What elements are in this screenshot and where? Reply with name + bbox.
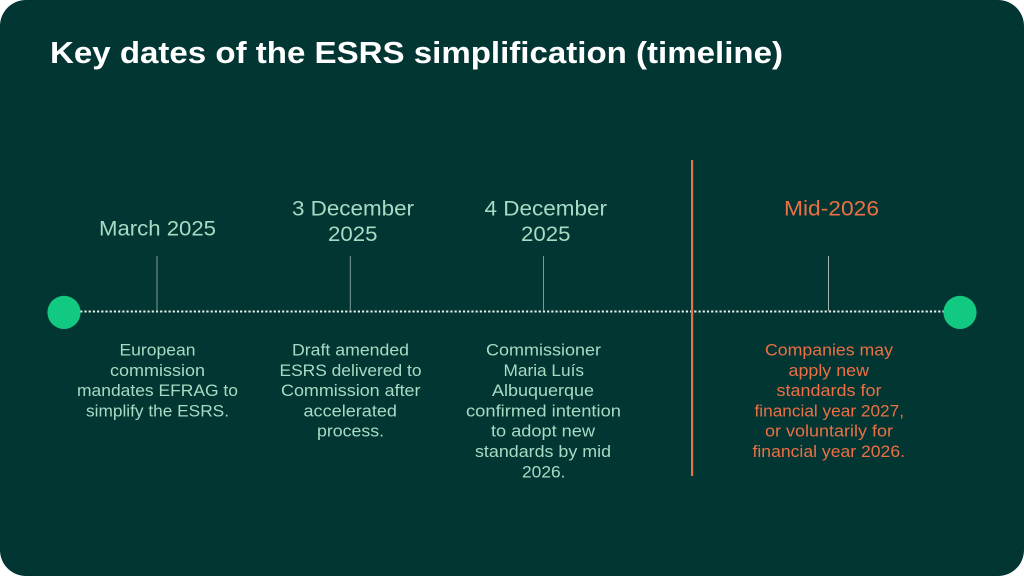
date heading: 2025 [328,223,378,246]
description: ESRS delivered to [280,362,422,380]
description: Maria Luís [504,362,584,380]
description: mandates EFRAG to [77,382,238,400]
milestone: 3 December 2025 [280,198,422,441]
description: 2026. [522,463,566,481]
description [280,342,422,441]
description: apply new [788,362,869,380]
description: simplify the ESRS. [86,402,229,420]
date heading: 2025 [521,223,570,246]
connector stem [156,256,158,311]
date heading [484,198,607,246]
description: to adopt new [491,423,595,441]
description [466,342,621,481]
date heading: 4 December [484,198,607,220]
description: standards by mid [475,443,611,461]
description: or voluntarily for [765,423,894,441]
description: accelerated [304,402,397,420]
description: commission [110,362,205,380]
date heading: Mid-2026 [784,198,879,220]
connector stem [350,256,351,311]
description: Draft amended [292,342,409,360]
connector stem [828,256,829,311]
description [77,342,238,420]
description: Commission after [281,382,421,400]
description [752,342,905,461]
description: Albuquerque [492,382,594,400]
description: financial year 2026. [752,443,905,461]
date heading: March 2025 [99,218,216,240]
milestone: March 2025 [77,218,238,420]
description: Companies may [765,342,894,360]
milestone: Mid-2026 [752,198,905,461]
description: European [120,342,196,360]
timeline end marker [943,296,977,329]
description: process. [317,423,384,441]
description: Commissioner [486,342,602,360]
timeline start marker [47,296,81,329]
connector stem [543,256,544,311]
date heading [292,198,414,246]
description: confirmed intention [466,402,621,420]
orange divider between past and future [691,160,693,476]
description: standards for [776,382,882,400]
date heading: 3 December [292,198,414,220]
timeline dotted axis [80,310,944,312]
description: financial year 2027, [754,402,904,420]
title: Key dates of the ESRS simplification (timeline) [50,35,783,70]
milestone: 4 December 2025 [466,198,621,481]
